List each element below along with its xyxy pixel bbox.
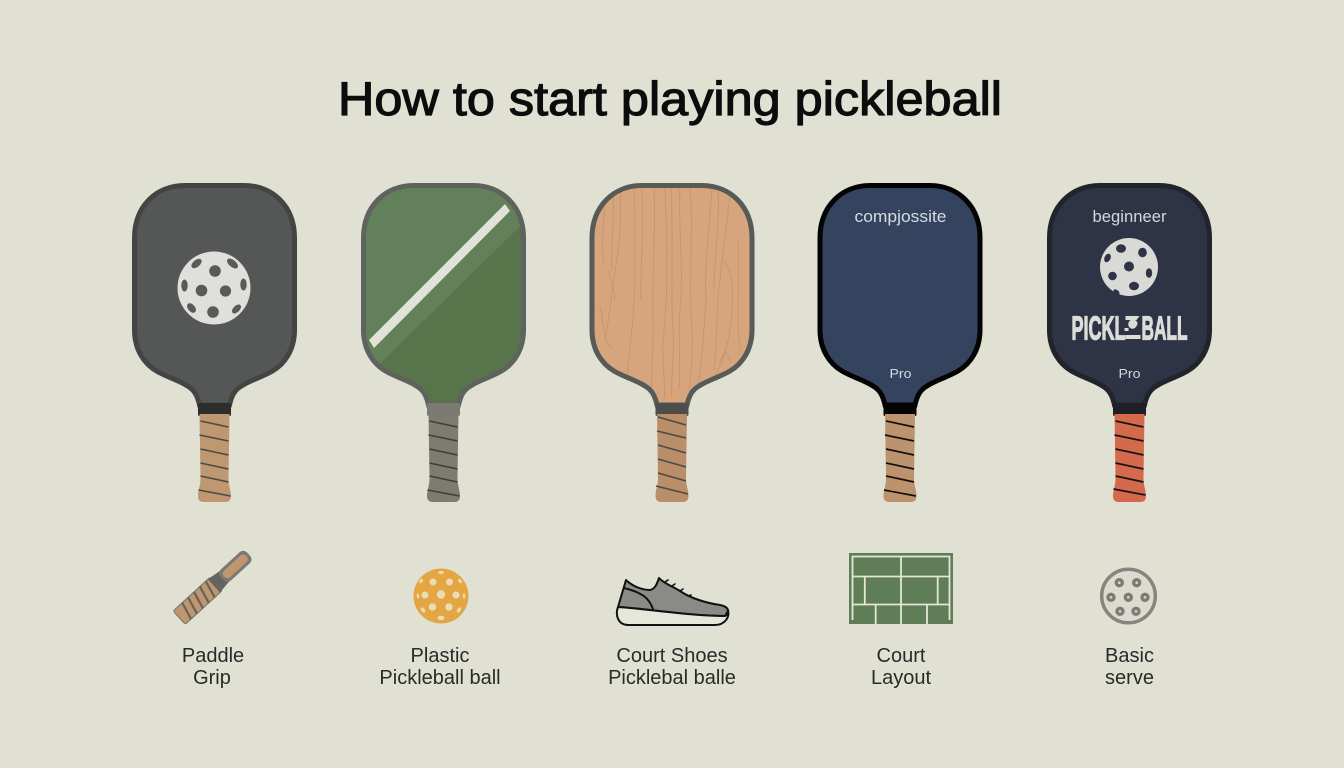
paddle 2: green with stripe	[364, 186, 534, 502]
paddle 3: wood	[592, 186, 752, 502]
label: PICKLEBALL wordmark: PICKL	[1072, 310, 1126, 346]
label: Paddle Grip: Paddle	[182, 645, 244, 667]
infographic canvas	[132, 80, 1212, 688]
label: pro: Pro	[890, 366, 912, 381]
item: paddle grip	[173, 548, 255, 689]
label: Court Shoes Pickleball balle: Picklebal balle	[608, 667, 736, 689]
icon: court shoe	[617, 578, 728, 625]
label: compjossite: compjossite	[854, 207, 947, 226]
label: Court Layout: Layout	[871, 667, 931, 689]
label: pro: Pro	[1118, 366, 1140, 381]
icon: ball on grey paddle	[178, 252, 250, 324]
item: plastic ball	[379, 568, 501, 689]
icon: grey ball outline	[1102, 569, 1155, 623]
paddle 1: grey with ball	[134, 186, 294, 502]
paddle 5: dark beginner	[1050, 186, 1210, 502]
title: How to start playing pickleball	[338, 72, 1002, 125]
item: court shoes	[608, 578, 736, 689]
icon: court diagram	[849, 553, 953, 624]
icon: ball on dark paddle	[1100, 238, 1158, 296]
label: Basic serve: serve	[1105, 667, 1154, 689]
paddle 4: navy composite	[820, 186, 980, 502]
label: Plastic Pickleball ball: Plastic	[411, 645, 469, 667]
item: basic serve	[1102, 569, 1155, 689]
label: Basic serve: Basic	[1105, 645, 1154, 667]
label: Court Layout: Court	[877, 645, 926, 667]
wood grain texture	[600, 188, 740, 400]
label: Paddle Grip: Grip	[193, 667, 231, 689]
label: PICKLEBALL wordmark: BALL	[1142, 310, 1188, 346]
item: court layout	[849, 553, 953, 689]
label: Court Shoes Pickleball balle: Court Shoes	[616, 645, 728, 667]
icon: paddle grip	[173, 548, 255, 624]
label: Plastic Pickleball ball: Pickleball ball	[379, 667, 501, 689]
icon: orange pickleball	[414, 568, 468, 624]
label: beginneer: beginneer	[1092, 208, 1167, 226]
